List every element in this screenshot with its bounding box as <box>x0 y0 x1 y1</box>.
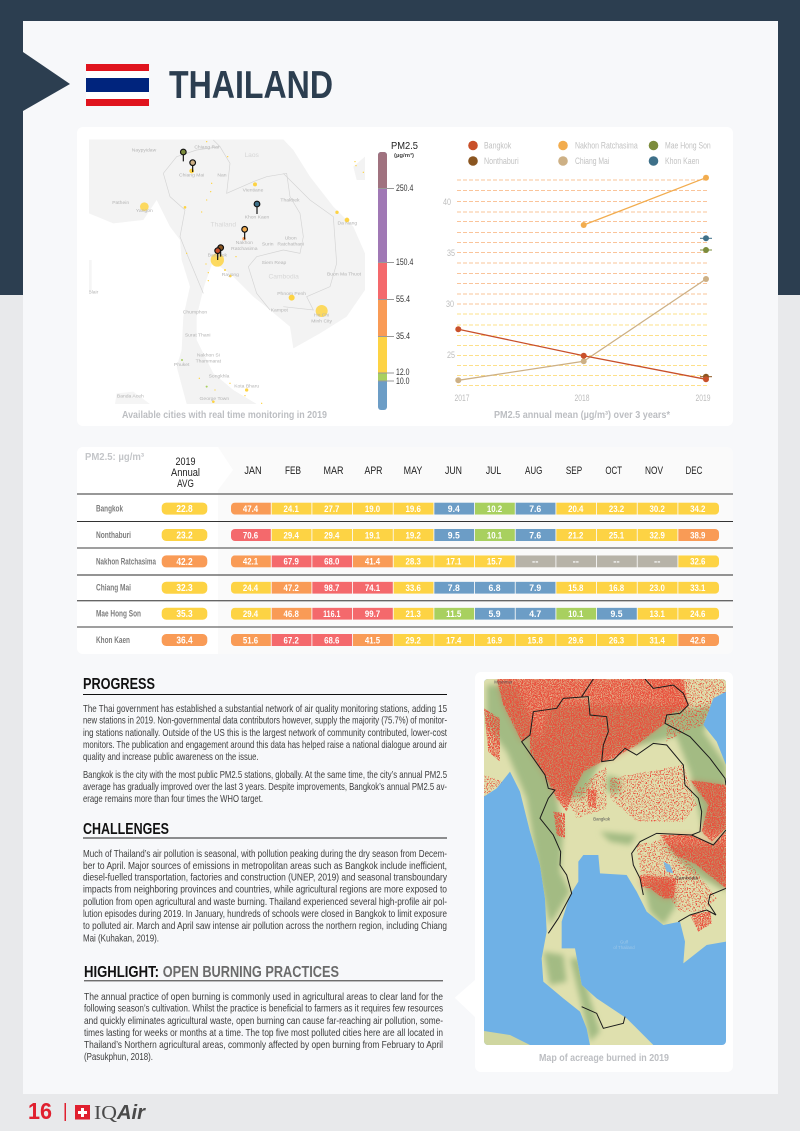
map labels: Gulf <box>620 940 629 945</box>
row: Bangkok: 19.6 <box>406 504 421 515</box>
page number: 16 <box>28 1098 52 1124</box>
text block: challenges: Mai (Kuhakan, 2019). <box>83 934 159 945</box>
map labels: Banda Aceh <box>117 394 144 400</box>
map labels <box>88 145 362 402</box>
map labels: Nan <box>217 173 227 179</box>
row: Chiang Mai: 33.1 <box>690 583 706 594</box>
row: Bangkok: 24.1 <box>284 504 299 515</box>
PM2.5 colour scale: 10.0 <box>396 376 410 386</box>
map labels: Chiang Mai <box>179 173 204 179</box>
text block: highlight: times lasting for weeks or months at a time. The top five most polluted cities here are all located in <box>84 1028 443 1039</box>
title arrow <box>23 52 70 111</box>
row: Bangkok: 22.8 <box>176 503 193 515</box>
row: Nakhon Ratchasima: 67.9 <box>284 557 299 568</box>
map labels: George Town <box>200 396 229 402</box>
map labels: Bangkok <box>208 253 228 259</box>
row: Nonthaburi: 32.9 <box>650 530 665 541</box>
table header: MAY <box>404 465 423 477</box>
row: Nakhon Ratchasima: 42.1 <box>243 557 259 568</box>
map labels: Thailand <box>211 221 236 228</box>
row: Khon Kaen: 17.4 <box>446 635 462 646</box>
table header: APR <box>364 465 383 477</box>
row: Mae Hong Son: 5.9 <box>488 609 500 620</box>
row: Mae Hong Son: 11.5 <box>446 609 462 620</box>
icon: Thai flag <box>86 64 149 106</box>
row: Khon Kaen: 29.6 <box>568 635 583 646</box>
row: Bangkok: 9.4 <box>448 504 460 515</box>
row: Khon Kaen: 41.5 <box>365 635 381 646</box>
map labels: Surat Thani <box>185 333 211 339</box>
row: Khon Kaen <box>96 634 719 646</box>
heading: challenges: CHALLENGES <box>83 821 169 838</box>
row: Bangkok: 27.7 <box>324 504 339 515</box>
PM2.5 colour scale <box>378 140 418 410</box>
series: Chiang Mai <box>455 276 709 383</box>
row: Bangkok: 7.6 <box>529 504 541 515</box>
row: Nonthaburi: 7.6 <box>529 530 541 541</box>
line chart: PM2.5 annual mean: 2019 <box>696 393 710 404</box>
series: Nakhon Ratchasima <box>581 175 709 228</box>
map labels: Rayong <box>222 272 239 278</box>
table header: PM2.5: µg/m³ <box>85 452 145 463</box>
row: Nonthaburi: 9.5 <box>448 530 460 541</box>
row: Chiang Mai: 23.0 <box>650 583 665 594</box>
text block: highlight: (Pasukphun, 2018). <box>84 1052 153 1063</box>
table header: OCT <box>605 465 622 477</box>
row: Khon Kaen: 36.4 <box>176 634 193 646</box>
map labels: Pathein <box>112 200 129 206</box>
text block: challenges: lution episodes during 2019. In January, hundreds of schools were closed in Bangkok to limit exposure <box>83 909 447 920</box>
row: Nakhon Ratchasima: 28.3 <box>406 557 421 568</box>
row: Nonthaburi: 25.1 <box>609 530 625 541</box>
footer <box>28 1098 146 1124</box>
row: Chiang Mai: 33.6 <box>406 583 421 594</box>
map caption: Available cities with real time monitoring in 2019 <box>122 409 327 421</box>
row: Nakhon Ratchasima: 41.4 <box>365 557 381 568</box>
row: Nakhon Ratchasima <box>96 555 719 568</box>
row: Bangkok: 10.2 <box>487 504 502 515</box>
line chart: PM2.5 annual mean: 35 <box>447 248 455 259</box>
table header: NOV <box>645 465 663 477</box>
series: Bangkok <box>455 326 709 382</box>
chart legend: Bangkok <box>484 140 512 150</box>
chart legend: Nonthaburi <box>484 156 519 166</box>
PM2.5 colour scale: 150.4 <box>396 257 413 267</box>
row: Mae Hong Son: 13.1 <box>650 609 665 620</box>
row: Khon Kaen: Khon Kaen <box>96 635 130 645</box>
city air quality dots <box>140 141 364 404</box>
PM2.5 colour scale: 250.4 <box>396 183 413 193</box>
text block: challenges: impacts from neighboring provinces and countries, while agricultural regions are more exposed to <box>83 885 447 896</box>
line chart: PM2.5 annual mean: 2018 <box>574 393 590 404</box>
icon: Swiss cross <box>75 1105 90 1120</box>
title: THAILAND <box>169 64 333 107</box>
chart legend: Nakhon Ratchasima <box>575 140 638 150</box>
map labels: Laos <box>244 152 260 159</box>
row: Chiang Mai: 47.2 <box>284 583 299 594</box>
map labels: Thammarat <box>196 359 222 365</box>
row: Bangkok: 34.2 <box>690 504 705 515</box>
divider <box>64 1103 66 1121</box>
logo: IQAir: IQ <box>94 1102 118 1124</box>
row: Khon Kaen: 67.2 <box>284 635 299 646</box>
table header: SEP <box>566 465 582 477</box>
map labels: of Thailand <box>613 945 635 950</box>
row: Khon Kaen: 31.4 <box>650 635 665 646</box>
map labels <box>494 680 698 950</box>
line chart: PM2.5 annual mean: 40 <box>443 197 451 208</box>
table header: JUN <box>445 465 462 477</box>
row: Mae Hong Son: 21.3 <box>406 609 421 620</box>
text block: challenges: Much of Thailand’s air pollution is seasonal, with pollution peaking during the dry season from Decem- <box>83 849 447 860</box>
heading: progress: PROGRESS <box>83 676 155 693</box>
row: Nonthaburi: 23.2 <box>176 530 193 542</box>
map labels: Bangkok <box>593 816 611 821</box>
map labels: Nakhon Si <box>197 353 220 359</box>
text block: progress: The Thai government has established a substantial network of air quality monitoring stations, adding 15 <box>83 704 447 715</box>
row: Chiang Mai: 15.8 <box>568 583 584 594</box>
row: Chiang Mai: 6.8 <box>488 583 501 594</box>
text block: progress: erage remains more than four times the WHO target. <box>83 794 263 805</box>
map labels: Yangon <box>136 208 153 214</box>
burn haze <box>497 679 726 898</box>
row: Khon Kaen: 68.6 <box>324 635 339 646</box>
chart legend: Mae Hong Son <box>665 140 711 150</box>
text block: highlight: following season’s cultivation. Whilst the practice is beneficial to farmers as it requires few resources <box>84 1004 443 1015</box>
row: Nakhon Ratchasima: -- <box>654 557 660 568</box>
text block: highlight <box>84 992 443 1063</box>
row: Chiang Mai: 98.7 <box>324 583 339 594</box>
row: Nakhon Ratchasima: -- <box>532 557 538 568</box>
text block: challenges: to polluted air. March and April saw intense air pollution across the northern region, including Chiang <box>83 921 447 932</box>
text block: progress: ing stations nationally. Outside of the US this is the largest network of community contributed, lower-cost <box>83 728 447 739</box>
row: Mae Hong Son: 9.5 <box>610 609 623 620</box>
row: Nakhon Ratchasima: Nakhon Ratchasima <box>96 556 157 566</box>
map labels: Phnom Penh <box>277 291 306 297</box>
text block: progress: quality and increase public awareness on the issue. <box>83 752 258 763</box>
heading: highlight: HIGHLIGHT: <box>84 964 159 981</box>
text block: highlight: The annual practice of open burning is commonly used in agricultural areas to clear land for the <box>84 992 443 1003</box>
map labels: Kota Bharu <box>234 384 259 390</box>
row: Nonthaburi: Nonthaburi <box>96 530 131 540</box>
row: Nonthaburi: 70.6 <box>243 530 258 541</box>
map labels: Da Nang <box>337 221 357 227</box>
row: Khon Kaen: 26.3 <box>609 635 624 646</box>
map labels: Phuket <box>174 362 190 368</box>
text block: progress: average has gradually improved over the last 3 years. Despite improvements, Bangkok’s annual PM2.5 av- <box>83 782 447 793</box>
row: Bangkok: 19.0 <box>365 504 380 515</box>
row: Chiang Mai <box>96 582 719 594</box>
row: Nonthaburi: 38.9 <box>690 530 705 541</box>
row: Mae Hong Son: Mae Hong Son <box>96 609 141 619</box>
table header: Annual <box>171 467 200 479</box>
table header: 2019 <box>176 456 196 468</box>
row: Bangkok <box>96 503 719 515</box>
text block: progress: new stations in 2019. Non-governmental data contributors however, supply the majority (75.7%) of monitor- <box>83 716 447 726</box>
row: Khon Kaen: 29.2 <box>406 635 421 646</box>
chart legend: Chiang Mai <box>575 156 609 166</box>
series: Mae Hong Son <box>700 247 712 253</box>
map labels: Thakhek <box>280 198 300 204</box>
text block: challenges <box>83 849 448 945</box>
row: Mae Hong Son: 35.3 <box>176 608 193 620</box>
line chart: PM2.5 annual mean: 30 <box>446 299 454 310</box>
heading: highlight: OPEN BURNING PRACTICES <box>163 964 339 981</box>
row: Nakhon Ratchasima: 68.0 <box>324 557 339 568</box>
terrain <box>487 685 726 1042</box>
row: Chiang Mai: 16.8 <box>609 583 625 594</box>
text block: progress: Bangkok is the city with the most public PM2.5 stations, globally. At the same time, the city’s annual PM2.5 <box>83 770 447 781</box>
map labels: Chumphon <box>183 309 207 315</box>
table header: AVG <box>177 478 194 490</box>
row: Mae Hong Son <box>96 608 719 620</box>
map labels: Khon Kaen <box>245 215 270 221</box>
text block: challenges: pollution from open agricultural and waste burning. Thailand experienced several high-profile air pol- <box>83 897 447 908</box>
chart legend <box>468 140 711 166</box>
table header: DEC <box>686 465 703 477</box>
line chart: PM2.5 annual mean: 2017 <box>454 393 470 404</box>
map labels: Chiang Rai <box>194 145 219 151</box>
text block: highlight: and quickly eliminates agricultural waste, open burning can cause far-reaching air pollution, some- <box>84 1016 443 1027</box>
map labels: Ratchasima <box>231 246 258 252</box>
row: Nakhon Ratchasima: 15.7 <box>487 557 502 568</box>
map labels: Cambodia <box>675 876 698 882</box>
row: Nonthaburi <box>96 529 719 542</box>
chart legend: Khon Kaen <box>665 156 699 166</box>
table header: FEB <box>285 465 301 477</box>
map labels: Surin <box>262 242 274 248</box>
map labels: Ubon <box>285 236 297 242</box>
map: burned acreage <box>484 679 726 1045</box>
row: Mae Hong Son: 116.1 <box>323 609 341 620</box>
map labels: Naypyidaw <box>132 148 157 154</box>
text block: progress <box>83 704 447 805</box>
heading: highlight <box>84 964 443 981</box>
PM2.5 colour scale: (µg/m³) <box>394 152 414 159</box>
row: Chiang Mai: Chiang Mai <box>96 583 131 593</box>
map labels: Minh City <box>311 319 333 325</box>
row: Mae Hong Son: 99.7 <box>365 609 380 620</box>
text block: challenges: diesel-fuelled transportation, factories and construction (UNEP, 2019) and seasonal transboundary <box>83 873 448 884</box>
row: Nonthaburi: 19.2 <box>406 530 421 541</box>
borders <box>522 679 726 1028</box>
PM2.5 colour scale: 55.4 <box>396 294 410 304</box>
row: Nakhon Ratchasima: 42.2 <box>176 556 193 568</box>
PM2.5 colour scale: 12.0 <box>396 367 410 377</box>
map caption: Map of acreage burned in 2019 <box>539 1052 669 1064</box>
row: Khon Kaen: 51.6 <box>243 635 258 646</box>
map labels: Songkhla <box>209 374 230 380</box>
row: Nakhon Ratchasima: 32.6 <box>690 557 705 568</box>
row: Chiang Mai: 24.4 <box>243 583 259 594</box>
logo: IQAir <box>94 1102 146 1124</box>
row: Nakhon Ratchasima: -- <box>613 557 620 568</box>
map labels: Nakhon <box>236 240 253 246</box>
map labels: Vientiane <box>243 188 264 194</box>
row: Nakhon Ratchasima: -- <box>573 557 579 568</box>
row: Bangkok: 20.4 <box>568 504 584 515</box>
map labels: Buon Ma Thuot <box>327 272 362 278</box>
series: Nonthaburi <box>700 374 712 380</box>
panel: map and trend chart <box>89 140 712 420</box>
row: Bangkok: 30.2 <box>650 504 665 515</box>
panel: monthly table <box>77 447 733 654</box>
table header: MAR <box>324 465 344 477</box>
row: Mae Hong Son: 4.7 <box>529 609 541 620</box>
PM2.5 colour scale: 35.4 <box>396 331 410 341</box>
map labels: Siem Reap <box>262 260 287 266</box>
map labels: Ho Chi <box>314 313 329 319</box>
text block: progress: monitors. The publication and engagement around this data has helped raise a national dialogue around air <box>83 740 447 751</box>
table header: AUG <box>525 465 542 477</box>
row: Khon Kaen: 42.6 <box>690 635 705 646</box>
line chart: PM2.5 annual mean: 25 <box>447 350 455 361</box>
row: Bangkok: Bangkok <box>96 504 124 514</box>
row: Khon Kaen: 16.9 <box>487 635 502 646</box>
row: Nonthaburi: 29.4 <box>324 530 340 541</box>
row: Mae Hong Son: 24.6 <box>690 609 705 620</box>
table header: JUL <box>486 465 501 477</box>
text block: challenges: ber to April. Major sources of emissions in metropolitan areas such as Bangkok include inefficient, <box>83 861 447 872</box>
row: Khon Kaen: 15.8 <box>528 635 543 646</box>
table header <box>85 452 703 490</box>
chart caption: PM2.5 annual mean (µg/m³) over 3 years* <box>494 409 671 421</box>
row: Mae Hong Son: 46.8 <box>284 609 299 620</box>
row: Nonthaburi: 29.4 <box>284 530 299 541</box>
dense burn areas <box>484 679 726 932</box>
line chart: PM2.5 annual mean <box>443 175 712 404</box>
text block: highlight: Thailand’s Northern agricultural areas, commonly affected by open burning from February to April <box>84 1040 443 1051</box>
row: Mae Hong Son: 10.1 <box>568 609 584 620</box>
row: Chiang Mai: 7.8 <box>448 583 460 594</box>
map labels: Cambodia <box>268 273 299 280</box>
row: Chiang Mai: 7.9 <box>529 583 541 594</box>
row: Nonthaburi: 19.1 <box>365 530 381 541</box>
row: Nakhon Ratchasima: 17.1 <box>446 557 462 568</box>
row: Chiang Mai: 74.1 <box>365 583 381 594</box>
table header: JAN <box>244 465 262 477</box>
map: monitoring cities <box>88 139 365 404</box>
row: Bangkok: 47.4 <box>243 504 259 515</box>
map pins <box>180 149 260 260</box>
series: Khon Kaen <box>700 235 712 241</box>
logo: IQAir: Air <box>116 1102 146 1124</box>
map labels: Myanmar <box>494 680 513 685</box>
PM2.5 colour scale: PM2.5 <box>391 140 418 152</box>
dark header band <box>0 0 800 295</box>
row: Nonthaburi: 10.1 <box>487 530 503 541</box>
map labels: Kampot <box>271 307 289 313</box>
map labels: Ratchathani <box>277 242 304 248</box>
row: Nonthaburi: 21.2 <box>568 530 583 541</box>
row: Mae Hong Son: 29.4 <box>243 609 259 620</box>
panel: burned acreage map <box>484 679 726 1063</box>
row: Bangkok: 23.2 <box>609 504 624 515</box>
row: Chiang Mai: 32.3 <box>176 582 193 594</box>
map labels: Blair <box>88 289 99 295</box>
